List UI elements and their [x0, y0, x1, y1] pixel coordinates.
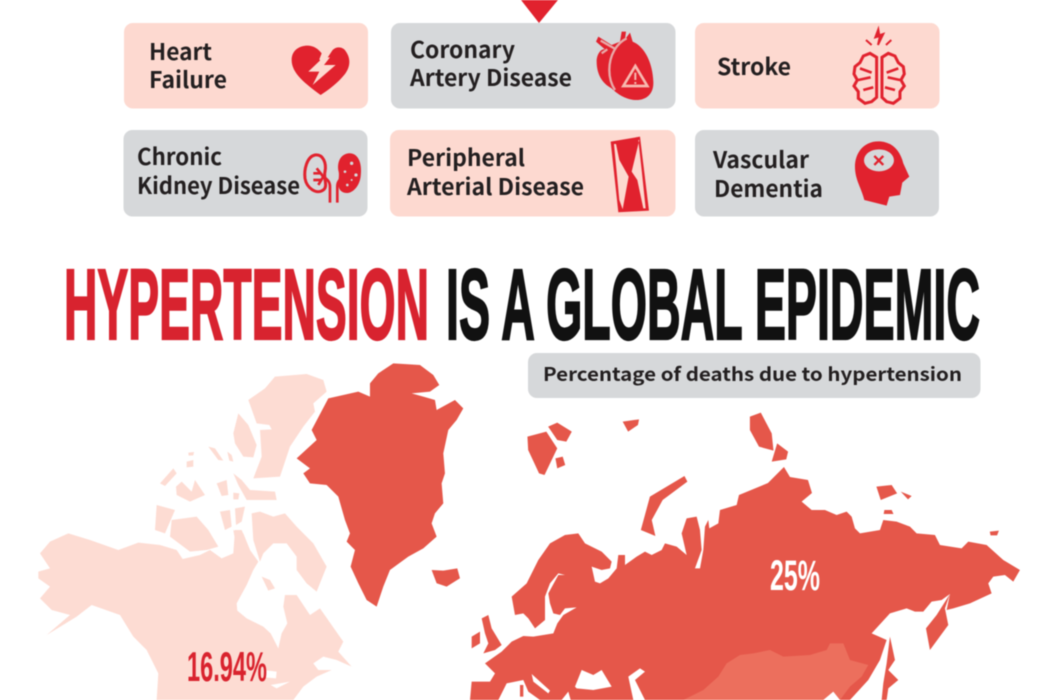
value: North America: 16.94%: [187, 643, 267, 690]
landmass: Arctic archipelago: [155, 374, 327, 552]
card: heart failure: Failure: [149, 61, 227, 95]
card: heart failure: [124, 23, 368, 108]
card: peripheral arterial disease: Arterial Disease: [406, 168, 584, 202]
card: coronary artery disease: Artery Disease: [409, 59, 572, 93]
subtitle label: Percentage of deaths due to hypertension: [543, 360, 962, 387]
Arctic islands: [527, 413, 999, 536]
card: stroke: Stroke: [717, 48, 791, 82]
card: vascular dementia: [695, 130, 939, 216]
card: coronary artery disease: Coronary: [410, 31, 515, 65]
map: world: [38, 363, 1020, 700]
icon: kidneys: [305, 153, 361, 203]
region: Greenland and Iceland: [297, 363, 463, 607]
icon: brain: [854, 29, 904, 103]
icon: broken heart: [292, 46, 349, 95]
card: heart failure: Heart: [149, 33, 212, 67]
region: North America: [38, 374, 352, 700]
value: Russia: 25%: [770, 552, 820, 600]
mainland Europe and Asia: [470, 467, 1020, 700]
card: peripheral arterial disease: Peripheral: [407, 139, 525, 173]
inland seas: [498, 668, 840, 700]
icon: head with x: [855, 141, 909, 206]
card: chronic kidney disease: Chronic: [137, 138, 222, 172]
title: HYPERTENSION: [64, 249, 429, 361]
card: vascular dementia: Vascular: [712, 141, 810, 175]
Sicily: [520, 685, 523, 697]
icon: heart with warning: [596, 32, 653, 100]
Kamchatka and Japan: [882, 594, 950, 700]
card: stroke: [695, 23, 940, 108]
Britain and Ireland: [472, 615, 502, 653]
panel: related diseases: [124, 23, 940, 216]
card: chronic kidney disease: Kidney Disease: [137, 167, 300, 201]
pointer arrow: [521, 0, 558, 23]
icon: narrowed artery: [611, 137, 649, 212]
subtitle label: [528, 353, 980, 398]
card: coronary artery disease: [391, 23, 676, 108]
landmass: mainland Canada, USA, Baffin: [38, 512, 352, 700]
card: chronic kidney disease: [124, 130, 368, 216]
region: Eurasia: [470, 413, 1020, 700]
card: vascular dementia: Dementia: [714, 170, 823, 204]
card: peripheral arterial disease: [390, 130, 676, 216]
China: [683, 643, 868, 700]
